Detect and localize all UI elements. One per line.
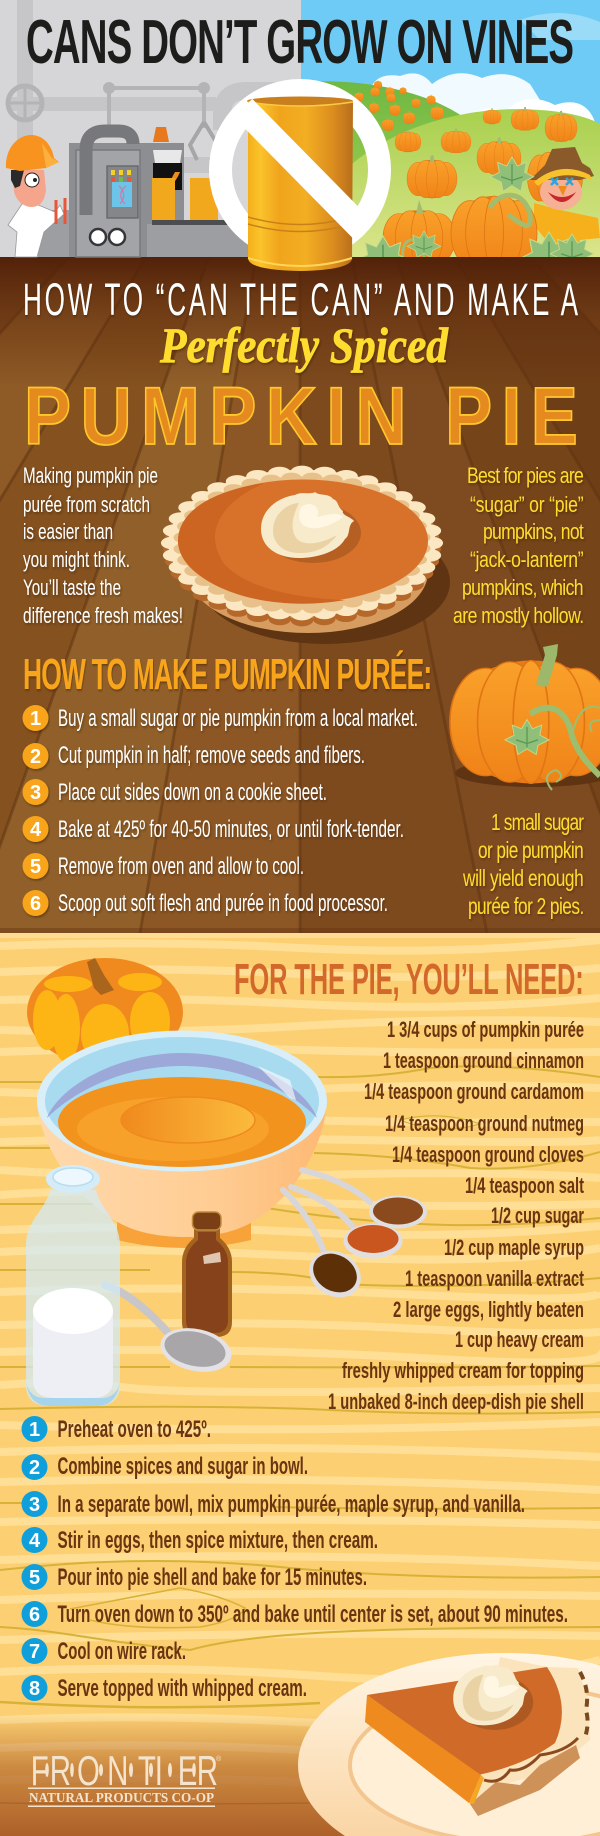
list: pie steps: Serve topped with whipped cream. [58,1675,307,1702]
list: pie steps: Pour into pie shell and bake for 15 minutes. [58,1564,367,1591]
text block: intro [23,463,183,628]
text block: best pumpkins note: pumpkins, which [462,576,584,601]
icon: measuring spoons [283,1170,427,1307]
heading: for the pie you'll need: FOR THE PIE, YOU’LL NEED: [234,954,584,1004]
list: puree steps: Remove from oven and allow to cool. [58,853,304,880]
icon: large tin can [247,96,353,271]
list: pie steps: 8 [29,1678,40,1700]
text block: intro: is easier than [23,519,113,544]
text block: yield note: 1 small sugar [491,811,584,836]
list: puree steps: 3 [30,782,41,804]
text block: intro: You’ll taste the [23,575,121,600]
list: pie steps: 5 [29,1567,40,1589]
heading: perfectly spiced: Perfectly Spiced [159,317,449,373]
text block: intro: you might think. [23,547,130,572]
icon: mixing bowl [37,1030,327,1248]
list: puree steps: Bake at 425º for 40-50 minutes, or until fork-tender. [58,816,404,843]
list: puree steps: Cut pumpkin in half; remove seeds and fibers. [58,742,365,769]
icon: milk bottle [26,1165,120,1406]
icon: tiny pumpkins on the hill [354,80,444,131]
text block: best pumpkins note: “sugar” or “pie” [470,493,584,518]
icon: pie slice on plate [298,1653,600,1836]
icon: field of pumpkins [395,107,582,204]
list: pie steps: Cool on wire rack. [58,1638,186,1665]
list: pie steps: Stir in eggs, then spice mixture, then cream. [58,1527,378,1554]
list: pie steps: 4 [29,1530,41,1552]
text block: yield note: will yield enough [462,867,584,892]
logo: frontier: NATURAL PRODUCTS CO-OP [29,1791,214,1806]
list: pie steps: 6 [29,1604,40,1626]
text block: best pumpkins note: “jack-o-lantern” [470,548,584,573]
title: CANS DON’T GROW ON VINES [26,7,574,76]
icon: small yellow pumpkin [27,958,183,1066]
text block: intro: purée from scratch [23,492,150,517]
icon: scarecrow [530,147,600,280]
icon: conveyor belt [152,220,247,225]
icon: big spoon [105,1285,236,1378]
icon: no symbol slash [243,108,365,232]
list: puree steps [22,705,418,917]
icon: worker in hard hat [6,135,65,257]
panel: machine [38,127,251,257]
text block: yield note: or pie pumpkin [478,839,584,864]
icon: gooseneck pipe [86,131,133,215]
text block: intro: Making pumpkin pie [23,463,158,488]
text block: best pumpkins note: are mostly hollow. [453,604,584,629]
list: pie steps [22,1416,568,1702]
text block: best pumpkins note [453,464,584,629]
list: puree steps: 2 [30,746,41,768]
text block: intro: difference fresh makes! [23,603,183,628]
list: ingredients [328,1017,584,1414]
list: puree steps: 4 [30,819,42,841]
text block: yield note: purée for 2 pies. [468,895,584,920]
list: puree steps: 5 [30,856,41,878]
icon: whole pumpkin pie [168,470,450,644]
icon: gauges [90,229,125,245]
grain lines [0,1066,600,1804]
logo: frontier: FRONTIER [31,1747,218,1794]
heading: how to can the can: HOW TO “CAN THE CAN” AND MAKE A [23,275,578,325]
panel: light wood background [0,933,600,1836]
list: pie steps: Preheat oven to 425º. [58,1416,211,1443]
text block: yield note [462,811,584,920]
panel: wood table background [0,257,600,933]
icon: pumpkin with vine [450,644,600,790]
icon: no symbol ring [220,90,380,250]
list: pie steps: Combine spices and sugar in bowl. [58,1453,308,1480]
panel: factory side background [0,0,301,260]
heading: how to make pumpkin puree: HOW TO MAKE PUMPKIN PURÉE: [23,649,432,699]
panel: farm side background [300,0,600,260]
logo: frontier: ® [216,1755,222,1763]
icon: foreground pumpkins and vines [357,157,594,278]
heading: pumpkin pie: PUMPKIN PIE [24,371,578,462]
list: pie steps: 2 [29,1457,40,1479]
list: pie steps: 1 [29,1419,40,1441]
icon: cans on conveyor [152,178,218,220]
control panel [107,166,138,218]
list: puree steps: Scoop out soft flesh and purée in food processor. [58,890,388,917]
list: pie steps: 3 [29,1494,40,1516]
list: puree steps: Place cut sides down on a cookie sheet. [58,779,327,806]
icon: vanilla bottle [182,1212,232,1337]
icon: orange chute [153,127,169,142]
text block: best pumpkins note: pumpkins, not [483,520,584,545]
list: pie steps: 7 [29,1641,40,1663]
list: puree steps: 6 [30,893,41,915]
list: puree steps: 1 [30,708,41,730]
text block: best pumpkins note: Best for pies are [467,464,584,489]
